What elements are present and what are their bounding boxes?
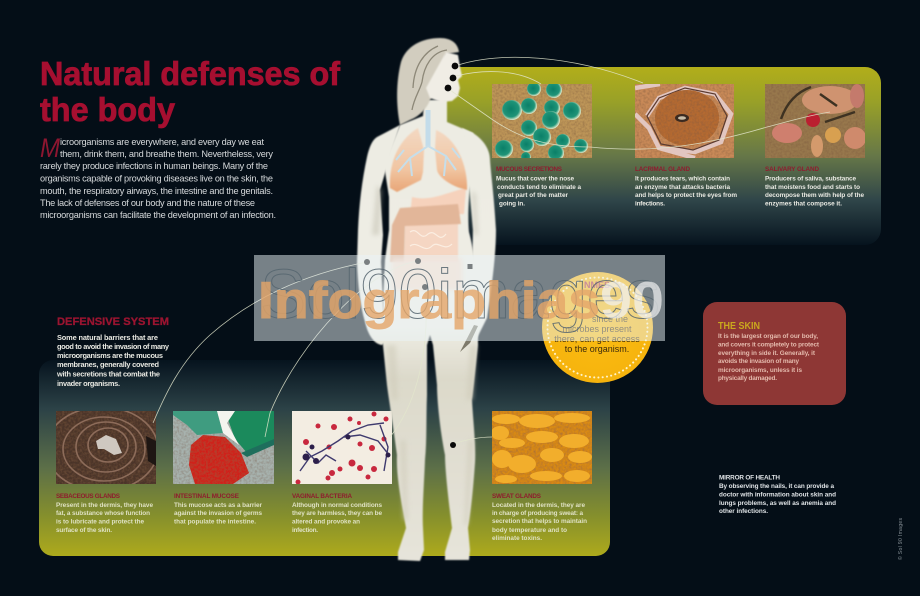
- caption: intestinal mucose: This mucose acts as a barrier: [174, 502, 262, 509]
- text block: mirror of health: By observing the nails, it can provide a: [719, 483, 834, 490]
- caption: vaginal bacteria: Although in normal conditions: [292, 502, 382, 509]
- photo: sweat glands: [492, 411, 592, 484]
- caption: lacrimal gland: LACRIMAL GLAND: [635, 166, 690, 173]
- caption: salivary gland: Producers of saliva, substance: [765, 176, 856, 182]
- caption: sweat glands: SWEAT GLANDS: [492, 493, 541, 500]
- heading and text: defensive system: microorganisms are the mucous: [57, 351, 163, 360]
- text block: mirror of health: other infections.: [719, 508, 768, 515]
- right lung: [435, 130, 467, 190]
- intro text block: M: [40, 133, 60, 163]
- panel: the skin: [703, 302, 846, 405]
- panel: the skin: It is the largest organ of our body,: [718, 333, 818, 340]
- title: [40, 55, 341, 128]
- panel: the skin: microorganisms, unless it is: [718, 367, 802, 374]
- panel: the skin: and covers it completely to protect: [718, 342, 820, 348]
- caption: sebaceous glands: surface of the skin.: [56, 527, 112, 534]
- caption: salivary gland: [765, 166, 864, 208]
- copyright credit: © Sol 90 Images: [897, 518, 904, 560]
- panel: lower olive gradient: [39, 360, 610, 556]
- panel: the skin: physically damaged.: [718, 375, 777, 382]
- caption: sweat glands: in charge of producing sweat: a: [492, 510, 583, 517]
- intro text block: mouth, the respiratory airways, the intestine and the genitals.: [40, 186, 273, 196]
- caption: vaginal bacteria: infection.: [292, 527, 318, 534]
- thigh and lower-leg shading: [386, 345, 477, 525]
- human figure with organs: [357, 38, 496, 561]
- torso and legs: [383, 100, 478, 561]
- caption: vaginal bacteria: they are harmless, they can be: [292, 510, 382, 517]
- anatomical marker dots: [364, 63, 472, 448]
- intro text block: The lack of defenses of our body and the nature of these: [40, 198, 255, 208]
- caption: sebaceous glands: is to lubricate and protect the: [56, 518, 144, 526]
- intro text block: organisms capable of provoking diseases live on the skin, the: [40, 174, 273, 184]
- text block: mirror of health: [719, 474, 836, 515]
- caption: lacrimal gland: and helps to protect the eyes from: [635, 192, 737, 199]
- yellow callout circle: there, can get access: [554, 334, 640, 344]
- yellow callout circle: since the: [592, 314, 628, 324]
- intro text block: [40, 133, 276, 220]
- colon: [390, 204, 461, 262]
- yellow callout circle: [542, 272, 653, 383]
- caption: sebaceous glands: fat, a substance whose function: [56, 510, 150, 517]
- caption: lacrimal gland: infections.: [635, 200, 665, 208]
- heading and text: defensive system: good to avoid the invasion of many: [57, 342, 170, 351]
- arm shading: [372, 185, 478, 235]
- caption: mucous secretions: MUCOUS SECRETIONS: [496, 166, 562, 173]
- caption: sweat glands: [492, 493, 587, 542]
- caption: mucous secretions: going in.: [499, 200, 525, 208]
- yellow callout circle: to the organism.: [565, 344, 629, 354]
- heading and text: defensive system: with secretions that combat the: [56, 370, 160, 378]
- panel: the skin: everything in side it. Generally, it: [718, 350, 816, 357]
- face: [426, 52, 462, 102]
- intro text block: microorganisms can facilitate the development of an infection.: [40, 210, 276, 220]
- caption: salivary gland: SALIVARY GLAND: [765, 166, 819, 173]
- caption: mucous secretions: Mucus that cover the nose: [496, 176, 574, 182]
- caption: lacrimal gland: It produces tears, which contain: [635, 176, 730, 182]
- title: Natural defenses of: [40, 55, 341, 92]
- caption: intestinal mucose: that populate the intestine.: [174, 518, 256, 526]
- caption: lacrimal gland: [635, 166, 737, 208]
- panel: the skin: avoids the invasion of many: [718, 358, 799, 365]
- watermark banner: Sol90images: [260, 255, 660, 333]
- caption: sweat glands: eliminate toxins.: [492, 535, 542, 542]
- caption: sebaceous glands: SEBACEOUS GLANDS: [56, 493, 120, 500]
- photo: vaginal bacteria: [292, 411, 392, 484]
- right-hand fingers shadow: [460, 325, 478, 352]
- caption: intestinal mucose: [174, 493, 262, 526]
- intro text block: rarely they produce infections in human beings. Many of the: [40, 161, 268, 171]
- right arm: [460, 128, 496, 352]
- connector lines: [153, 57, 830, 444]
- heading and text: defensive system: Some natural barriers that are: [57, 333, 158, 342]
- lower abdomen pink tone: [392, 258, 462, 290]
- stomach: [410, 188, 466, 216]
- watermark banner: Infographias: [258, 272, 600, 330]
- caption: vaginal bacteria: altered and provoke an: [292, 518, 360, 526]
- panel: the skin: THE SKIN: [718, 321, 760, 332]
- photo: salivary gland: [765, 84, 865, 158]
- photo: intestinal mucose: [173, 411, 274, 484]
- caption: vaginal bacteria: [292, 493, 382, 534]
- yellow callout circle: NMES: [584, 280, 610, 290]
- caption: mucous secretions: great part of the matter: [498, 192, 568, 199]
- caption: mucous secretions: conducts tend to eliminate a: [497, 184, 581, 191]
- heading and text: defensive system: [56, 316, 170, 388]
- photo: lacrimal gland: [635, 84, 734, 158]
- caption: sebaceous glands: [56, 493, 153, 534]
- intro text block: them, drink them, and breathe them. Nevertheless, very: [60, 149, 273, 159]
- yellow callout circle: microbes present: [562, 324, 632, 334]
- photo: sebaceous glands: [56, 411, 156, 484]
- caption: intestinal mucose: against the invasion of germs: [174, 510, 262, 517]
- photo: mucous secretions: [492, 84, 592, 158]
- heading and text: defensive system: DEFENSIVE SYSTEM: [57, 316, 169, 328]
- left arm: [357, 125, 400, 345]
- title: the body: [40, 91, 176, 128]
- left lung: [390, 128, 424, 192]
- heading and text: defensive system: membranes, generally covered: [57, 360, 159, 369]
- caption: vaginal bacteria: VAGINAL BACTERIA: [292, 493, 352, 500]
- intro text block: icroorganisms are everywhere, and every day we eat: [60, 137, 264, 147]
- caption: mucous secretions: [496, 166, 581, 208]
- caption: intestinal mucose: INTESTINAL MUCOSE: [174, 493, 239, 500]
- watermark banner: 90: [600, 272, 664, 330]
- caption: sweat glands: Located in the dermis, they are: [492, 502, 585, 509]
- hair: [397, 38, 459, 125]
- text block: mirror of health: MIRROR OF HEALTH: [719, 474, 780, 482]
- caption: sweat glands: body temperature and to: [492, 527, 567, 534]
- caption: salivary gland: enzymes that compose it.: [765, 200, 842, 208]
- caption: salivary gland: that moistens food and starts to: [765, 184, 860, 191]
- small intestine: [404, 222, 458, 262]
- panel: upper olive gradient: [440, 67, 881, 245]
- caption: sebaceous glands: Present in the dermis, they have: [56, 502, 153, 509]
- caption: salivary gland: decompose them with help of the: [765, 192, 864, 199]
- text block: mirror of health: lungs problems, as well as anemia and: [719, 500, 836, 507]
- trachea and bronchi: [426, 110, 430, 146]
- caption: lacrimal gland: an enzyme that attacks bacteria: [635, 184, 730, 191]
- heading and text: defensive system: invader organisms.: [57, 379, 120, 388]
- caption: sweat glands: secretion that helps to maintain: [492, 518, 587, 525]
- text block: mirror of health: doctor with information about skin and: [719, 492, 836, 498]
